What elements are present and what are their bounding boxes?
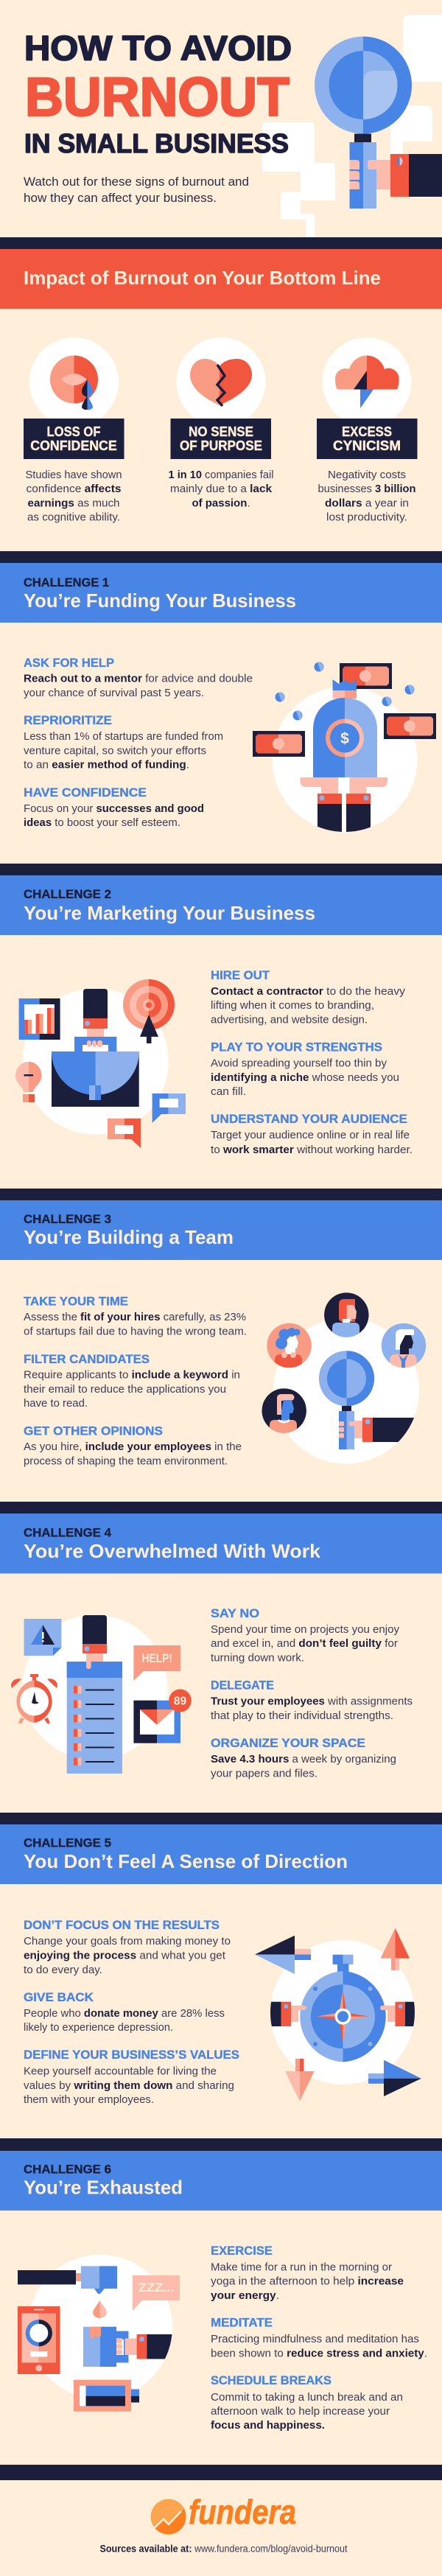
tip: hire out [211, 968, 406, 1026]
icon: arm and coffee pour [18, 2266, 117, 2294]
heading band: You’re Building a Team [24, 1226, 234, 1248]
tip: reprioritize: venture capital, so switch your efforts [24, 744, 206, 757]
tip: exercise: your energy. [211, 2289, 279, 2302]
label [171, 419, 271, 459]
icon: bag [313, 679, 377, 777]
icon: compass [300, 1955, 386, 2062]
tip: filter candidates: their email to reduce the applications you [24, 1383, 226, 1396]
icon: magnifying glass in hand [319, 1351, 424, 1449]
tip: define your business's values [24, 2048, 239, 2106]
label: EXCESS [342, 424, 392, 439]
text block: businesses 3 billion [318, 483, 415, 495]
card: excess cynicism [317, 337, 417, 523]
icon: coffee drop [93, 2300, 107, 2318]
tip: understand your audience: UNDERSTAND YOUR AUDIENCE [211, 1112, 407, 1126]
panel: challenge 1 [0, 551, 442, 833]
illustration: overwhelmed with work [11, 1615, 192, 1774]
header panel [24, 15, 442, 237]
heading band [0, 864, 442, 935]
tip: play to your strengths: identifying a niche whose needs you [211, 1071, 399, 1084]
subtitle: how they can affect your business. [24, 191, 217, 205]
icon: hands [265, 2002, 420, 2026]
text block: confidence affects [27, 483, 121, 495]
tip: take your time [24, 1294, 247, 1338]
text block: dollars a year in [325, 497, 409, 510]
label: NO SENSE [189, 424, 253, 439]
tip: exercise [211, 2244, 404, 2302]
portrait: top [324, 1292, 369, 1340]
tip: reprioritize [24, 713, 223, 771]
text block [168, 469, 274, 510]
icon: bag: $ [340, 730, 349, 747]
title: IN SMALL BUSINESS [24, 128, 289, 158]
icon: mail with badge: 89 [174, 1695, 186, 1708]
tip: play to your strengths [211, 1040, 399, 1098]
icon: eye with tear [29, 337, 119, 427]
tip: understand your audience [211, 1112, 413, 1156]
heading band [0, 551, 442, 623]
icon: arrow down left [285, 2059, 315, 2101]
tip: ask for help [24, 656, 253, 699]
heading band: You Don’t Feel A Sense of Direction [24, 1850, 348, 1872]
tip: filter candidates: Require applicants to include a keyword in [24, 1369, 240, 1381]
tip: ask for help: ASK FOR HELP [24, 656, 114, 670]
heading band [0, 2138, 442, 2211]
decorative white blobs [262, 15, 442, 237]
icon: blue speech bubble [152, 1093, 186, 1123]
text block: as cognitive ability. [27, 511, 120, 523]
icon: storm cloud [323, 337, 411, 427]
illustration: candidate search [262, 1292, 426, 1463]
tip: filter candidates: have to read. [24, 1397, 88, 1410]
tip: don't focus on the results: DON’T FOCUS ON THE RESULTS [24, 1918, 220, 1932]
tip: understand your audience: to work smarter without working harder. [211, 1144, 413, 1156]
tip: take your time: TAKE YOUR TIME [24, 1294, 128, 1309]
icon: coral speech bubble [108, 1119, 141, 1148]
icon: magnifying glass in hand [315, 37, 442, 209]
tip: hire out: lifting when it comes to branding, [211, 999, 374, 1012]
icon: warning note [24, 1619, 61, 1656]
tip: take your time: of startups fail due to having the wrong team. [24, 1325, 247, 1338]
tip: understand your audience: Target your audience online or in real life [211, 1129, 410, 1141]
heading band: You’re Funding Your Business [24, 589, 296, 612]
tip: say no: turning down work. [211, 1652, 304, 1664]
tip: give back [24, 1990, 225, 2034]
icon: arrow up left [255, 1936, 311, 1974]
tip: organize your space: ORGANIZE YOUR SPACE [211, 1736, 365, 1750]
illustration: money bag [253, 662, 436, 833]
label: LOSS OF [47, 424, 100, 439]
text block: of passion. [192, 497, 250, 510]
heading band: CHALLENGE 4 [24, 1525, 112, 1540]
tip: play to your strengths: Avoid spreading yourself too thin by [211, 1057, 387, 1070]
icon: phone [18, 2306, 60, 2374]
tip: don't focus on the results: Change your goals from making money to [24, 1935, 231, 1947]
tip: delegate: DELEGATE [211, 1679, 274, 1692]
tip: take your time: Assess the fit of your hires carefully, as 23% [24, 1311, 246, 1323]
icon: help speech bubble [133, 1645, 180, 1681]
icon: lightbulb [15, 1062, 42, 1102]
band [0, 237, 442, 309]
tip: have confidence: ideas to boost your self esteem. [24, 816, 180, 829]
icon: broken heart [177, 337, 265, 427]
tip: have confidence: HAVE CONFIDENCE [24, 785, 147, 799]
tip: organize your space [211, 1736, 396, 1780]
icon: arrow up right [381, 1928, 410, 1970]
text block: lost productivity. [326, 511, 407, 523]
tip: delegate: that play to their individual strengths. [211, 1709, 393, 1722]
logo: fundera [150, 2499, 296, 2535]
tip: define your business's values: Keep yourself accountable for living the [24, 2065, 217, 2078]
tip: reprioritize: Less than 1% of startups are funded from [24, 730, 223, 743]
title: HOW TO AVOID [24, 28, 292, 68]
icon: bar chart [19, 998, 60, 1040]
tip: say no: Spend your time on projects you enjoy [211, 1623, 399, 1636]
heading band [0, 1502, 442, 1574]
heading band: You’re Exhausted [24, 2177, 183, 2199]
text block: mainly due to a lack [170, 483, 273, 495]
label: CYNICISM [333, 438, 401, 453]
tip: organize your space: your papers and files. [211, 1767, 318, 1780]
tip: meditate: MEDITATE [211, 2315, 273, 2330]
tip: say no [211, 1606, 399, 1664]
heading band: You’re Marketing Your Business [24, 902, 315, 924]
tip: delegate: Trust your employees with assignments [211, 1695, 413, 1708]
heading band [0, 1189, 442, 1260]
icon: alarm clock [11, 1674, 57, 1723]
tip: meditate [211, 2315, 427, 2359]
panel: challenge 6 [0, 2138, 442, 2432]
tip: ask for help: your chance of survival past 5 years. [24, 687, 204, 699]
icon: zzz speech bubble: ZZZ... [138, 2281, 174, 2295]
logo: fundera: fundera [189, 2493, 296, 2531]
tip: have confidence [24, 785, 204, 829]
tip: hire out: advertising, and website design. [211, 1014, 368, 1026]
tip: reprioritize: REPRIORITIZE [24, 713, 112, 727]
heading band: CHALLENGE 6 [24, 2162, 111, 2177]
band: Impact of Burnout on Your Bottom Line [24, 267, 381, 289]
icon: target with arrow [123, 979, 175, 1043]
portrait: lower left [262, 1388, 306, 1437]
icon: mail with badge [133, 1689, 192, 1743]
tip: play to your strengths: can fill. [211, 1085, 246, 1098]
subtitle [24, 175, 249, 205]
tip: hire out: Contact a contractor to do the heavy [211, 985, 406, 998]
tip: delegate [211, 1679, 413, 1722]
icon: arm holding briefcase [52, 989, 139, 1107]
icon: coffee mug with hand [83, 2327, 176, 2367]
tip: schedule breaks: Commit to taking a lunch break and an [211, 2391, 403, 2404]
panel: impact of burnout [0, 237, 442, 523]
tip: ask for help: Reach out to a mentor for advice and double [24, 672, 253, 685]
heading band: CHALLENGE 3 [24, 1212, 111, 1226]
label: CONFIDENCE [30, 438, 117, 453]
tip: get other opinions: GET OTHER OPINIONS [24, 1424, 163, 1438]
label [24, 419, 124, 459]
tip: organize your space: Save 4.3 hours a week by organizing [211, 1753, 396, 1765]
text block: Negativity costs [328, 469, 406, 481]
tip: define your business's values: values by writing them down and sharing [24, 2079, 234, 2092]
tip: get other opinions [24, 1424, 242, 1468]
panel: challenge 4 [0, 1502, 442, 1780]
text block [318, 469, 415, 523]
panel: challenge 3 [0, 1189, 442, 1468]
text block [25, 469, 122, 523]
tip: schedule breaks: afternoon walk to help increase your [211, 2405, 390, 2418]
tip: reprioritize: to an easier method of funding. [24, 759, 189, 771]
portrait: left [267, 1323, 312, 1371]
tip: exercise: yoga in the afternoon to help increase [211, 2275, 404, 2287]
tip: don't focus on the results [24, 1918, 231, 1976]
tip: schedule breaks: SCHEDULE BREAKS [211, 2373, 332, 2387]
title [24, 28, 292, 158]
tip: filter candidates [24, 1352, 240, 1410]
footer [0, 2465, 442, 2554]
icon: bills [253, 663, 436, 757]
icon: arm [83, 1615, 107, 1669]
heading band: You’re Overwhelmed With Work [24, 1540, 321, 1562]
tip: define your business's values: them with your employees. [24, 2093, 154, 2106]
text block: earnings as much [28, 497, 119, 510]
icon: arrow down right [368, 2060, 421, 2096]
tip: meditate: Practicing mindfulness and meditation has [211, 2333, 419, 2345]
heading band: CHALLENGE 5 [24, 1836, 111, 1849]
tip: define your business's values: DEFINE YOUR BUSINESS’S VALUES [24, 2048, 239, 2062]
tip: have confidence: Focus on your successes and good [24, 802, 204, 815]
tip: exercise: Make time for a run in the morning or [211, 2261, 392, 2274]
heading band [0, 1813, 442, 1884]
panel: challenge 5 [0, 1813, 442, 2106]
icon: hands [301, 777, 387, 833]
tip: don't focus on the results: to do every day. [24, 1964, 102, 1976]
illustration: marketing briefcase [15, 979, 186, 1148]
heading band: CHALLENGE 1 [24, 575, 109, 589]
tip: get other opinions: process of shaping the team environment. [24, 1455, 228, 1468]
tip: schedule breaks: focus and happiness. [211, 2419, 325, 2432]
tip: give back: People who donate money are 28% less [24, 2007, 225, 2020]
icon: checklist clipboard [67, 1662, 122, 1774]
tip: hire out: HIRE OUT [211, 968, 270, 982]
text block: 1 in 10 companies fail [168, 469, 274, 481]
tip: say no: SAY NO [211, 1606, 259, 1620]
icon: help speech bubble: HELP! [141, 1651, 172, 1665]
tip: meditate: been shown to reduce stress and anxiety. [211, 2348, 427, 2359]
illustration: compass [255, 1928, 421, 2101]
icon: zzz speech bubble [133, 2275, 180, 2311]
tip: say no: and excel in, and don’t feel guilty for [211, 1637, 398, 1650]
icon: battery [74, 2380, 139, 2412]
subtitle: Watch out for these signs of burnout and [24, 175, 249, 189]
tip: exercise: EXERCISE [211, 2244, 273, 2258]
text block: Studies have shown [25, 469, 122, 481]
tip: filter candidates: FILTER CANDIDATES [24, 1352, 150, 1366]
illustration: exhausted [18, 2255, 180, 2412]
heading band: CHALLENGE 2 [24, 887, 111, 901]
sources: Sources available at: www.fundera.com/blog/avoid-burnout [100, 2544, 348, 2554]
icon: coins [276, 662, 414, 721]
tip: play to your strengths: PLAY TO YOUR STRENGTHS [211, 1040, 382, 1054]
tip: schedule breaks [211, 2373, 403, 2432]
panel: challenge 2 [0, 864, 442, 1156]
card: no sense of purpose [168, 337, 274, 510]
portrait: right [382, 1323, 426, 1371]
tip: give back: GIVE BACK [24, 1990, 94, 2004]
title: BURNOUT [25, 66, 290, 127]
tip: don't focus on the results: enjoying the process and what you get [24, 1950, 226, 1961]
card: loss of confidence [24, 337, 124, 523]
tip: give back: likely to experience depression. [24, 2021, 173, 2034]
label: OF PURPOSE [180, 438, 262, 453]
tip: get other opinions: As you hire, include your employees in the [24, 1441, 242, 1453]
label [317, 419, 417, 459]
